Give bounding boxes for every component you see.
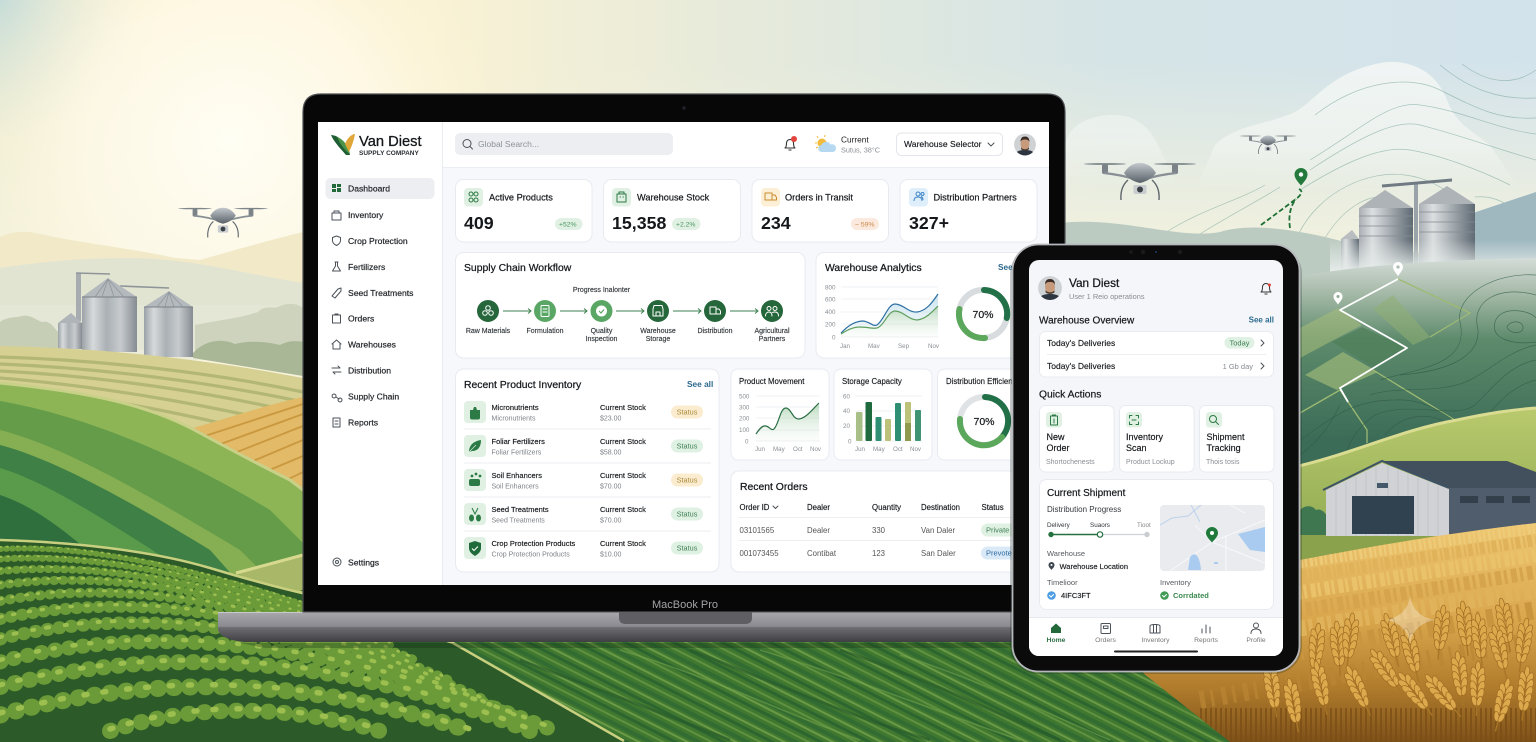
row: Foliar Fertilizers: Foliar Fertilizers bbox=[492, 437, 545, 446]
left green hill bbox=[0, 382, 302, 592]
panel: Storage Capacity: Jun bbox=[855, 446, 866, 453]
row: Crop Protection Products: Crop Protection Products bbox=[492, 539, 576, 548]
line chart: 400 bbox=[825, 309, 836, 316]
logo bbox=[331, 134, 422, 157]
warehouse overview: 1 Gb day bbox=[1223, 362, 1253, 371]
progress track: Tioot bbox=[1137, 522, 1151, 529]
sparkle bbox=[1386, 596, 1435, 644]
row: Crop Protection Products: Current Stock bbox=[600, 539, 646, 548]
action: New Order: New bbox=[1046, 432, 1065, 442]
bottom navigation bbox=[1029, 617, 1283, 656]
nav list: Supply Chain bbox=[348, 392, 399, 402]
workflow node: Warehouse Storage: Storage bbox=[646, 336, 670, 343]
camera bbox=[682, 106, 686, 110]
row: Seed Treatments bbox=[464, 503, 703, 525]
warehouse selector: Warehouse Selector bbox=[904, 139, 982, 149]
top bar bbox=[443, 122, 1049, 168]
weather: Sutus, 38°C bbox=[841, 146, 880, 154]
user avatar bbox=[1014, 134, 1036, 156]
row: Crop Protection Products: Crop Protection Products bbox=[492, 552, 570, 558]
KPI: Orders in Transit: Orders in Transit bbox=[785, 192, 853, 202]
white route with waypoints bbox=[1334, 262, 1407, 402]
action: New Order: Shortochenests bbox=[1046, 459, 1095, 466]
middle crop-row field bbox=[300, 590, 1300, 742]
left golden field bbox=[194, 397, 302, 488]
panel: Warehouse Analytics bbox=[816, 252, 1041, 358]
row: Foliar Fertilizers: Current Stock bbox=[600, 437, 646, 446]
line chart: Sep bbox=[898, 343, 910, 350]
warehouse overview: Today's Deliveries bbox=[1047, 361, 1115, 371]
panel: Storage Capacity: 20 bbox=[843, 423, 850, 430]
current shipment: Timelioor bbox=[1047, 578, 1078, 587]
warehouse selector bbox=[896, 133, 1002, 156]
current shipment: Current Shipment bbox=[1047, 488, 1126, 499]
panel: Product Movement: May bbox=[773, 446, 786, 453]
line chart: 800 bbox=[825, 284, 836, 292]
donut 70%: 70% bbox=[972, 309, 994, 321]
progress track: Suaors bbox=[1090, 522, 1110, 529]
row: Micronutrients: $23.00 bbox=[600, 416, 622, 422]
nav list: Settings bbox=[348, 558, 379, 568]
panel: Recent Orders: 123 bbox=[872, 549, 885, 558]
line chart: 600 bbox=[825, 296, 836, 304]
current shipment: Warehouse bbox=[1047, 549, 1085, 558]
row: Soil Enhancers: Soil Enhancers bbox=[492, 484, 539, 490]
tablet screen bbox=[1029, 260, 1283, 656]
left striped hill bbox=[0, 346, 302, 428]
nav: Inventory: Inventory bbox=[1142, 637, 1170, 644]
search bbox=[455, 133, 673, 155]
right green hill bbox=[1290, 408, 1536, 565]
nav list bbox=[332, 210, 413, 568]
row: Foliar Fertilizers bbox=[464, 435, 703, 457]
nav: Profile: Profile bbox=[1246, 637, 1266, 644]
KPI: Warehouse Stock: 15,358 bbox=[612, 213, 666, 233]
panel: Product Movement: 0 bbox=[745, 438, 749, 446]
KPI: Active Products: Active Products bbox=[489, 192, 553, 202]
line chart: Mav bbox=[868, 343, 881, 350]
panel: Recent Orders: Order ID bbox=[740, 503, 770, 512]
notification bell bbox=[785, 136, 797, 150]
warehouse overview: See all bbox=[1249, 316, 1274, 324]
warehouse overview: Warehouse Overview bbox=[1039, 316, 1135, 326]
row: Soil Enhancers bbox=[464, 469, 703, 491]
panel: Product Movement: 200 bbox=[739, 416, 750, 422]
panel: Recent Orders bbox=[731, 471, 1039, 572]
panel: Distribution Efficiency bbox=[938, 369, 1040, 460]
nav list: Crop Protection bbox=[348, 236, 408, 246]
warehouse overview: Today bbox=[1229, 338, 1250, 348]
workflow node: Agricultural Partners: Agricultural bbox=[754, 328, 790, 335]
nav list: Distribution bbox=[348, 366, 391, 376]
quick actions: Quick Actions bbox=[1039, 390, 1101, 400]
sidebar bbox=[318, 122, 443, 585]
row: Seed Treatments: Status bbox=[677, 510, 698, 518]
nav: Profile bbox=[1246, 623, 1266, 644]
panel: Recent Orders: Status bbox=[982, 503, 1004, 512]
home indicator bbox=[1114, 650, 1198, 652]
nav: Orders bbox=[1095, 624, 1116, 644]
current shipment: Inventory bbox=[1160, 578, 1191, 587]
row: Foliar Fertilizers: $58.00 bbox=[600, 450, 622, 456]
nav: Orders: Orders bbox=[1095, 637, 1116, 644]
nav list: Inventory bbox=[348, 210, 384, 220]
action: Shipment Tracking: Tracking bbox=[1206, 443, 1241, 453]
nav: Reports: Reports bbox=[1194, 637, 1218, 644]
workflow node: Warehouse Storage bbox=[640, 300, 676, 343]
panel: Storage Capacity: Oct bbox=[893, 446, 903, 453]
wheat field bbox=[1143, 523, 1536, 742]
panel: Product Movement: Product Movement bbox=[739, 377, 805, 386]
panel: Distribution Efficiency: 70% bbox=[973, 416, 995, 428]
panel: Recent Orders: 001073455 bbox=[740, 549, 779, 558]
row: Soil Enhancers: Status bbox=[677, 476, 698, 484]
left silos bbox=[58, 273, 193, 357]
panel: Recent Orders: Dealer bbox=[807, 526, 830, 535]
warehouse overview bbox=[1039, 316, 1274, 377]
nav: Home bbox=[1047, 624, 1066, 644]
row: Seed Treatments: Current Stock bbox=[600, 505, 646, 514]
panel: Recent Orders: Prevote bbox=[986, 548, 1012, 558]
action: New Order: Order bbox=[1046, 443, 1070, 453]
current shipment bbox=[1040, 480, 1274, 610]
KPI: Distribution Partners bbox=[900, 180, 1037, 242]
KPI: Warehouse Stock: +2.2% bbox=[676, 222, 695, 228]
nav list: Fertilizers bbox=[348, 262, 385, 272]
right topographic field bbox=[1300, 258, 1536, 464]
action: Inventory Scan: Inventory bbox=[1126, 432, 1164, 442]
row: Seed Treatments: Seed Treatments bbox=[492, 505, 549, 514]
user header bbox=[1038, 276, 1271, 301]
map bbox=[1160, 505, 1265, 571]
clouds and contour lines, right sky bbox=[1065, 62, 1536, 238]
user header: User 1 Reio operations bbox=[1069, 292, 1145, 301]
right distant hills bbox=[1060, 192, 1536, 300]
notch on base bbox=[619, 612, 752, 624]
panel: Recent Orders: Quantity bbox=[872, 503, 901, 512]
tablet bbox=[1010, 244, 1302, 674]
panel: Product Movement: 100 bbox=[739, 427, 750, 434]
nav: Dashboard active: Dashboard bbox=[348, 184, 390, 194]
barn bbox=[1323, 461, 1536, 536]
progress track: Delivery bbox=[1047, 522, 1071, 529]
panel: Distribution Efficiency: Distribution Efficiency bbox=[946, 377, 1020, 386]
logo: Van Diest bbox=[359, 134, 422, 150]
row: Soil Enhancers: Current Stock bbox=[600, 471, 646, 480]
workflow arrows bbox=[503, 308, 758, 314]
current shipment: Warehouse Location bbox=[1060, 562, 1128, 571]
line chart: Nov bbox=[928, 343, 940, 350]
row: Soil Enhancers: $70.00 bbox=[600, 484, 622, 490]
action: Inventory Scan bbox=[1120, 406, 1194, 472]
panel: Storage Capacity: 0 bbox=[848, 438, 852, 446]
KPI: Active Products bbox=[456, 180, 592, 242]
workflow node: Warehouse Storage: Warehouse bbox=[640, 328, 676, 335]
warehouse overview: Today's Deliveries bbox=[1047, 338, 1115, 348]
panel: Storage Capacity bbox=[834, 369, 932, 460]
action: Shipment Tracking: Shipment bbox=[1206, 432, 1245, 442]
workflow node: Distribution bbox=[697, 300, 733, 335]
KPI: Warehouse Stock: Warehouse Stock bbox=[637, 192, 710, 202]
workflow node: Quality Inspection: Inspection bbox=[586, 336, 618, 343]
dashboard screen bbox=[318, 122, 1049, 585]
panel: Recent Product Inventory: Recent Product Inventory bbox=[464, 380, 582, 391]
right silos bbox=[1330, 180, 1536, 272]
row: Micronutrients: Current Stock bbox=[600, 403, 646, 412]
row: Crop Protection Products bbox=[464, 537, 703, 559]
row: Soil Enhancers: Soil Enhancers bbox=[492, 471, 542, 480]
user header: Van Diest bbox=[1069, 276, 1120, 290]
panel: Recent Orders: Dealer bbox=[807, 503, 830, 512]
panel: Recent Orders: Destination bbox=[921, 503, 960, 512]
row: Foliar Fertilizers: Foliar Fertilizers bbox=[492, 450, 542, 456]
nav list: Reports bbox=[348, 418, 378, 428]
row: Foliar Fertilizers: Status bbox=[677, 442, 698, 450]
workflow node: Quality Inspection bbox=[586, 300, 618, 343]
MacBook Pro label: MacBook Pro bbox=[652, 599, 718, 611]
line chart bbox=[825, 284, 940, 350]
row: Crop Protection Products: Status bbox=[677, 544, 698, 552]
panel: Recent Orders: Van Daler bbox=[921, 526, 955, 535]
bars bbox=[856, 402, 921, 441]
row: Micronutrients bbox=[464, 401, 703, 423]
weather bbox=[815, 134, 880, 154]
KPI: Active Products: 409 bbox=[464, 213, 494, 233]
panel: Product Movement bbox=[731, 369, 829, 460]
panel: Product Movement: 300 bbox=[739, 404, 750, 412]
panel: Recent Orders: 03101565 bbox=[740, 526, 775, 535]
laptop bbox=[218, 94, 1150, 648]
current shipment: 4IFC3FT bbox=[1061, 591, 1091, 600]
row: Micronutrients: Micronutrients bbox=[492, 416, 536, 422]
camera cluster bbox=[1129, 250, 1182, 254]
row: Seed Treatments: $70.00 bbox=[600, 518, 622, 524]
row: Seed Treatments: Seed Treatments bbox=[492, 518, 545, 524]
drones bbox=[178, 136, 1296, 237]
search: Global Search... bbox=[478, 139, 539, 149]
tablet shadow and body bbox=[1010, 246, 1302, 674]
row: Crop Protection Products: $10.00 bbox=[600, 552, 622, 558]
panel: Product Movement: Jun bbox=[755, 446, 766, 453]
KPI: Orders in Transit: ~ 59% bbox=[855, 222, 874, 228]
panel: Product Movement: Oct bbox=[793, 446, 803, 453]
panel: Supply Chain Workflow: Progress Inalonter bbox=[573, 287, 631, 294]
soybean field bbox=[0, 540, 624, 742]
row: Micronutrients: Status bbox=[677, 408, 698, 416]
workflow node: Agricultural Partners: Partners bbox=[759, 336, 786, 343]
nav list: Seed Treatments bbox=[348, 288, 413, 298]
left far hills bbox=[0, 232, 303, 376]
logo: SUPPLY COMPANY bbox=[359, 150, 420, 157]
KPI: Distribution Partners: Distribution Partners bbox=[934, 192, 1017, 202]
panel: Supply Chain Workflow bbox=[456, 252, 805, 358]
nav: Home: Home bbox=[1047, 637, 1066, 644]
action: Inventory Scan: Scan bbox=[1126, 443, 1147, 453]
panel: Storage Capacity: 40 bbox=[843, 408, 850, 415]
current shipment: Corrdated bbox=[1173, 591, 1209, 600]
panel: Recent Orders: Private bbox=[986, 526, 1009, 534]
workflow node: Formulation bbox=[527, 300, 564, 335]
KPI: Warehouse Stock bbox=[604, 180, 740, 242]
panel: Storage Capacity: Storage Capacity bbox=[842, 377, 902, 386]
green location pin with dashed route bbox=[1261, 168, 1308, 228]
weather: Current bbox=[841, 134, 869, 144]
KPI: Active Products: +52% bbox=[559, 222, 577, 228]
panel: Warehouse Analytics: Warehouse Analytics bbox=[825, 263, 922, 274]
workflow node: Quality Inspection: Quality bbox=[591, 328, 613, 335]
progress track bbox=[1047, 522, 1151, 537]
line chart: Jan bbox=[840, 343, 851, 350]
workflow node: Raw Materials: Raw Materials bbox=[466, 328, 511, 335]
quick actions bbox=[1039, 390, 1274, 472]
KPI: Distribution Partners: 327+ bbox=[909, 213, 949, 233]
laptop base bbox=[218, 612, 1150, 642]
workflow node: Agricultural Partners bbox=[754, 300, 790, 343]
workflow node: Raw Materials bbox=[466, 300, 511, 335]
line chart: 0 bbox=[832, 334, 836, 342]
KPI: Orders in Transit bbox=[752, 180, 888, 242]
panel: Product Movement: Nov bbox=[810, 446, 822, 453]
panel: Product Movement: 500 bbox=[739, 394, 750, 400]
nav list: Warehouses bbox=[348, 340, 396, 350]
panel: Warehouse Analytics: See all bbox=[998, 262, 1024, 272]
panel: Recent Product Inventory bbox=[456, 369, 719, 572]
panel: Recent Product Inventory: See all bbox=[687, 379, 713, 389]
panel: Storage Capacity: Nov bbox=[910, 446, 922, 453]
panel: Storage Capacity: 60 bbox=[843, 394, 850, 400]
line chart: 200 bbox=[825, 322, 836, 328]
nav list: Orders bbox=[348, 314, 374, 324]
panel: Recent Orders: Recent Orders bbox=[740, 482, 808, 493]
nav: Dashboard active bbox=[326, 178, 434, 199]
nav: Reports bbox=[1194, 625, 1218, 644]
nav: Inventory bbox=[1142, 624, 1170, 644]
workflow node: Formulation: Formulation bbox=[527, 328, 564, 335]
row: Micronutrients: Micronutrients bbox=[492, 403, 539, 412]
panel: Recent Orders: San Daler bbox=[921, 549, 956, 558]
action: New Order bbox=[1040, 406, 1114, 472]
action: Shipment Tracking: Thois tosis bbox=[1206, 459, 1240, 466]
panel: Recent Orders: 330 bbox=[872, 526, 886, 535]
KPI: Orders in Transit: 234 bbox=[761, 213, 791, 233]
panel: Supply Chain Workflow: Supply Chain Workflow bbox=[464, 263, 572, 274]
action: Inventory Scan: Product Lockup bbox=[1126, 459, 1175, 466]
donut 70% bbox=[959, 290, 1007, 338]
current shipment: Distribution Progress bbox=[1047, 505, 1121, 514]
workflow node: Distribution: Distribution bbox=[697, 328, 733, 335]
panel: Recent Orders: Contibat bbox=[807, 549, 837, 558]
action: Shipment Tracking bbox=[1200, 406, 1274, 472]
panel: Storage Capacity: May bbox=[873, 446, 886, 453]
laptop lid and bezel bbox=[303, 94, 1065, 612]
